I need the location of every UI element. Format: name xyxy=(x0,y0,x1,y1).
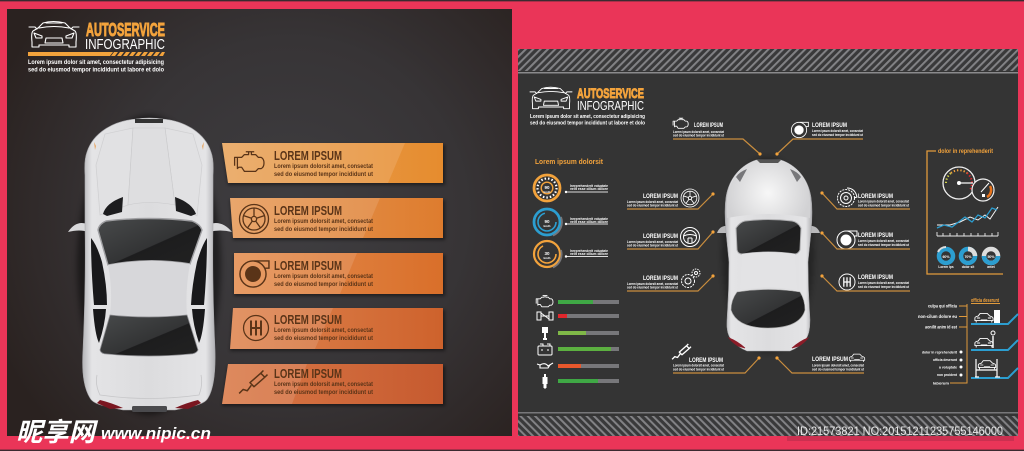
callout: gears xyxy=(627,269,715,291)
heading: autoservice: AUTOSERVICE xyxy=(86,20,165,40)
top hatch band xyxy=(518,49,1018,71)
description text: sed do eiusmod tempor incididunt ut labore et dolo xyxy=(530,120,646,126)
tail lights xyxy=(729,338,808,348)
gauge label 3 xyxy=(565,249,608,258)
roof xyxy=(108,261,190,318)
icon: piston xyxy=(542,327,548,340)
hood panels xyxy=(96,128,202,216)
gauge label 3: velit esse cillum dolore xyxy=(570,252,608,256)
text: ribbon 1: Lorem ipsum dolorsit amet, consectat xyxy=(274,163,374,170)
list: lower items: officia deserunt xyxy=(933,357,958,362)
text: ribbon 2: sed do eiusmod tempor incididunt ut xyxy=(274,226,374,233)
icon: car bumper xyxy=(849,354,865,362)
icon: wheel xyxy=(240,204,268,234)
list: upper items: aonilit anim id est xyxy=(925,324,958,330)
panel: service tree xyxy=(918,298,1018,386)
panel: right infographic xyxy=(518,49,1018,436)
hood xyxy=(726,161,810,218)
line chart xyxy=(937,207,998,236)
text: ribbon 1: LOREM IPSUM xyxy=(274,149,342,163)
gauge: orange ring: 30 xyxy=(544,251,550,256)
callout: turbo right: LOREM IPSUM xyxy=(858,232,893,239)
icon: car on lift xyxy=(978,361,996,369)
list: lower items: a voluptate xyxy=(939,364,958,370)
gauge: blue ring: 90 xyxy=(544,219,550,224)
callout: gears: Lorem ipsum dolorsit amet, consectat xyxy=(627,281,678,286)
watermark: site logo: 昵享网 xyxy=(16,412,99,449)
hood vents xyxy=(736,169,801,182)
heading: autoservice: AUTOSERVICE xyxy=(577,85,644,101)
callout: gear shift: Lorem ipsum dolorsit amet, consectat xyxy=(858,280,909,285)
gauge: speedometer: 90 xyxy=(544,185,550,190)
ribbon: exhaust xyxy=(222,364,445,406)
text: ribbon 2: LOREM IPSUM xyxy=(274,204,342,218)
status bars with icons xyxy=(536,296,619,389)
icon: gears xyxy=(682,269,700,288)
callout: exhaust: sed do eiusmod tempor incididunt ut xyxy=(673,366,724,372)
icon: logo car xyxy=(530,87,572,109)
heading: infographic: INFOGRAPHIC xyxy=(85,36,165,53)
callout: brake: LOREM IPSUM xyxy=(858,193,893,200)
callout: turbo top: Lorem ipsum dolorsit amet, consectat xyxy=(812,128,863,133)
donut 1 xyxy=(938,247,954,269)
bar: engine xyxy=(558,300,619,304)
callout: gear shift: LOREM IPSUM xyxy=(858,274,893,281)
panel: gauges and charts xyxy=(927,149,1003,274)
bar: battery xyxy=(558,347,619,351)
donut 2: dolor sit xyxy=(962,265,975,269)
watermark: ID text: ID:21573821 NO:20151211235755146000 xyxy=(797,424,1003,438)
icon: engine xyxy=(673,118,688,128)
callout: exhaust: Lorem ipsum dolorsit amet, consectat xyxy=(673,362,724,368)
roof xyxy=(740,252,797,290)
callout: bumper xyxy=(775,354,865,373)
rear bumper xyxy=(132,406,167,412)
gauge: speedometer: km/h xyxy=(543,190,551,194)
text: ribbon 3: sed do eiusmod tempor incididunt ut xyxy=(274,281,374,288)
callout: gears: sed do eiusmod tempor incididunt ut xyxy=(627,284,678,290)
watermark strip xyxy=(787,436,1014,441)
windshield xyxy=(736,220,801,254)
icon: exhaust xyxy=(672,344,691,359)
donut 3: amet xyxy=(987,265,996,269)
list: upper items: culpa qui officia xyxy=(928,304,958,308)
callout: engine: LOREM IPSUM xyxy=(694,122,723,129)
gauge: blue ring: km/h xyxy=(543,224,551,228)
text: ribbon 5: Lorem ipsum dolorsit amet, consectat xyxy=(274,381,374,388)
description text: sed do eiusmod tempor incididunt ut labore et dolo xyxy=(28,66,164,74)
icon: car at pump xyxy=(975,313,993,323)
callout: turbo right: Lorem ipsum dolorsit amet, consectat xyxy=(858,238,909,243)
icon: chassis xyxy=(537,312,553,320)
mirrors xyxy=(68,223,232,232)
icon: battery xyxy=(538,344,552,355)
text: ribbon 2: Lorem ipsum dolorsit amet, consectat xyxy=(274,218,374,225)
heading: gauges column: Lorem ipsum dolorsit xyxy=(535,157,603,166)
ribbon: gear shift xyxy=(230,308,445,351)
rear window xyxy=(731,290,805,328)
panel: left infographic xyxy=(7,9,512,436)
icon: turbo xyxy=(837,231,857,249)
icon: oil can xyxy=(537,363,553,368)
callout: turbo top: sed do eiusmod tempor incididunt ut xyxy=(812,132,863,137)
callout: steering wheel: Lorem ipsum dolorsit amet, consectat xyxy=(627,239,678,244)
icon: engine xyxy=(235,152,264,171)
icon: turbo xyxy=(240,261,269,287)
callout: bumper: sed do eiusmod tempor incididunt ut xyxy=(812,366,864,372)
icon: wheel xyxy=(681,189,699,207)
tail lights xyxy=(97,400,201,409)
hood top vent xyxy=(757,160,781,163)
watermark: site logo xyxy=(16,412,211,449)
header: left logo and title xyxy=(28,20,165,74)
callout: brake xyxy=(820,188,910,209)
gauge label 1: velit esse cillum dolore xyxy=(570,187,608,191)
callout: steering wheel: LOREM IPSUM xyxy=(643,233,678,240)
callout: steering wheel: sed do eiusmod tempor incididunt ut xyxy=(627,242,678,248)
gauge label 1: Inreprehenderit voluptate xyxy=(570,184,608,188)
gauge: blue ring xyxy=(534,209,562,236)
side windows xyxy=(91,238,207,343)
heading: infographic: INFOGRAPHIC xyxy=(577,98,644,113)
platform: lift xyxy=(971,359,1018,378)
car: top view, right xyxy=(717,157,820,353)
heading: reprehenderit: dolor in reprehenderit xyxy=(938,149,993,155)
callout: engine: Lorem ipsum dolorsit amet, consectat xyxy=(673,129,724,134)
callout: turbo right xyxy=(820,231,910,249)
description text: Lorem ipsum dolor sit amet, consectetur adipisicing xyxy=(28,59,164,66)
list: upper items xyxy=(918,304,958,330)
callout: bumper: LOREM IPSUM xyxy=(812,357,848,363)
text: ribbon 1: sed do eiusmod tempor incididunt ut xyxy=(274,171,374,178)
callout: exhaust: LOREM IPSUM xyxy=(689,358,723,364)
bar: piston xyxy=(558,331,619,335)
donut 2 xyxy=(961,249,975,269)
orange striped bar xyxy=(28,52,165,56)
callout: wheel: LOREM IPSUM xyxy=(643,193,678,200)
icon: turbo xyxy=(791,122,808,138)
gauge: speedometer xyxy=(534,175,560,201)
mirrors xyxy=(717,226,820,233)
gauge: orange ring: km/h xyxy=(543,256,551,260)
description text: Lorem ipsum dolor sit amet, consectetur adipisicing xyxy=(530,114,645,120)
donut 1: 60% xyxy=(942,255,950,259)
icon: logo car xyxy=(29,22,79,47)
ribbon: engine xyxy=(222,143,445,185)
callout: wheel: Lorem ipsum dolorsit amet, consectat xyxy=(627,199,678,204)
text: ribbon 5: sed do eiusmod tempor incididunt ut xyxy=(274,389,374,396)
icon: gear shift xyxy=(839,274,855,290)
icon: engine small xyxy=(536,296,553,307)
icon: brake disc xyxy=(838,188,857,206)
watermark: site logo: www.nipic.cn xyxy=(101,424,211,443)
ribbon: wheel xyxy=(230,198,445,240)
icon: car with wrench xyxy=(975,338,993,348)
donut 3: 50% xyxy=(987,255,995,259)
callout: turbo right: sed do eiusmod tempor incididunt ut xyxy=(858,242,909,247)
bar: chassis xyxy=(558,314,619,318)
callout: turbo top: LOREM IPSUM xyxy=(812,122,847,129)
ribbon: turbo xyxy=(234,253,445,296)
gauge label 2 xyxy=(565,217,608,225)
gauge label 2: Inreprehenderit voluptate xyxy=(570,217,608,221)
callout: wheel xyxy=(627,189,715,209)
text: ribbon 3: LOREM IPSUM xyxy=(274,259,342,273)
gauge: large dial xyxy=(943,167,975,199)
list: lower items xyxy=(922,350,962,386)
callout: steering wheel xyxy=(627,228,715,249)
header: right logo and title xyxy=(530,85,646,126)
callout: engine xyxy=(673,118,762,156)
icon: gear shift xyxy=(244,316,268,340)
gauge label 1 xyxy=(565,184,608,193)
gauge label 3: Inreprehenderit voluptate xyxy=(570,249,608,253)
text: ribbon 3: Lorem ipsum dolorsit amet, consectat xyxy=(274,273,374,280)
list: upper items: non-cilum dolore eu xyxy=(918,314,957,319)
list: lower items: dolor in reprehenderit xyxy=(922,350,958,354)
icon: spark plug xyxy=(542,374,548,389)
text: ribbon 4: sed do eiusmod tempor incididunt ut xyxy=(274,335,374,342)
gauge: small dial xyxy=(972,179,994,201)
bottom hatch band xyxy=(518,416,1018,436)
text: ribbon 5: LOREM IPSUM xyxy=(274,367,342,381)
callout: turbo top xyxy=(775,122,863,156)
callout: gear shift xyxy=(820,274,910,291)
car: top view, left xyxy=(68,115,232,415)
callout: brake: sed do eiusmod tempor incididunt ut xyxy=(858,202,909,208)
platform: fuel xyxy=(971,310,1018,324)
windshield xyxy=(98,218,202,265)
bar: spark plug xyxy=(558,379,619,383)
callout: gear shift: sed do eiusmod tempor incididunt ut xyxy=(858,284,909,289)
heading: officia deserunt: officia deserunt xyxy=(971,298,999,304)
text: ribbon 4: LOREM IPSUM xyxy=(274,313,342,327)
callout: brake: Lorem ipsum dolorsit amet, consectat xyxy=(858,198,909,204)
rear window xyxy=(100,315,198,356)
text: ribbon 4: Lorem ipsum dolorsit amet, consectat xyxy=(274,327,374,334)
callout: exhaust xyxy=(672,344,761,373)
gauge: orange ring xyxy=(534,241,562,268)
trunk line xyxy=(96,375,202,398)
bracket xyxy=(927,151,1003,274)
icon: exhaust xyxy=(239,370,268,393)
donut 3 xyxy=(984,249,998,269)
bar: oil xyxy=(558,364,619,368)
list: lower items: laborum xyxy=(933,380,949,386)
callout: gears: LOREM IPSUM xyxy=(643,275,678,282)
gauge label 2: velit esse cillum dolore xyxy=(570,220,608,224)
platform: wrench xyxy=(971,331,1018,350)
list: lower items: non proident xyxy=(937,372,958,377)
hood top vent xyxy=(135,119,163,123)
hood vents xyxy=(103,197,196,216)
donut 1: Lorem ips xyxy=(938,265,954,269)
donut 2: 70% xyxy=(964,255,972,259)
icon: steering wheel xyxy=(680,228,700,246)
callout: engine: sed do eiusmod tempor incididunt ut xyxy=(673,132,724,138)
callout: wheel: sed do eiusmod tempor incididunt ut xyxy=(627,202,678,208)
callout: bumper: Lorem ipsum dolorsit amet, consectat xyxy=(812,362,864,368)
